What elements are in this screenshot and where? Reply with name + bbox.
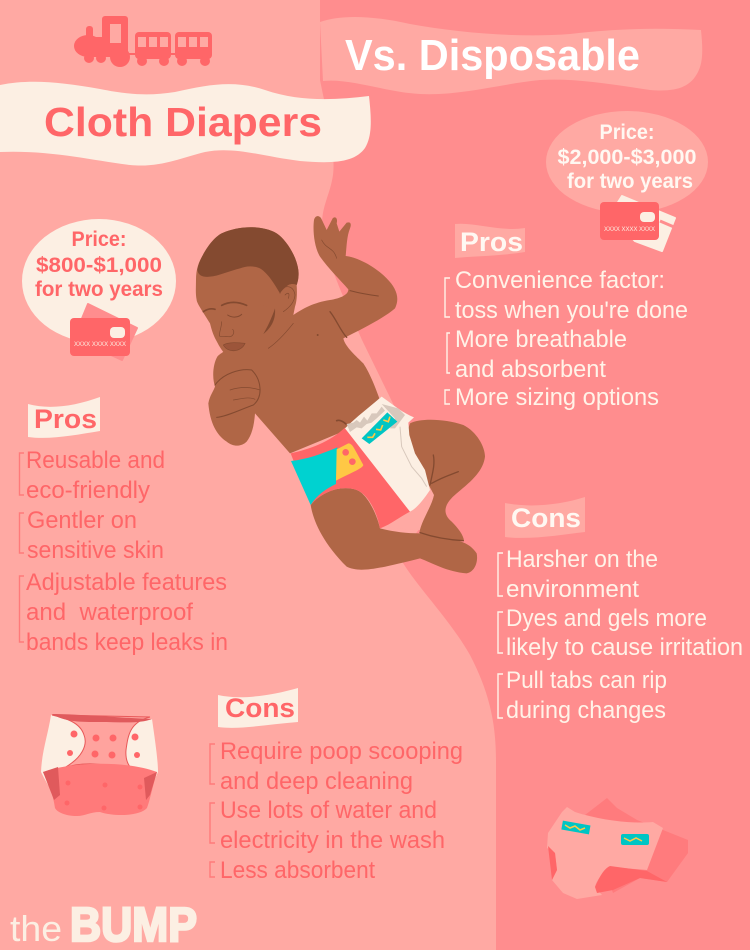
price bubble: disposable: $2,000-$3,000 (558, 146, 696, 169)
list: cloth cons: electricity in the wash (220, 827, 445, 854)
list: disposable pros: and absorbent (455, 356, 606, 383)
heading: cloth cons: Cons (225, 693, 295, 723)
list: disposable cons: Harsher on the (506, 546, 658, 573)
price bubble: disposable (546, 111, 708, 213)
logo: the bump: the (10, 908, 62, 949)
baby lower leg (311, 488, 477, 573)
list: disposable cons: environment (506, 576, 639, 603)
list: disposable cons: Dyes and gels more (506, 605, 707, 632)
heading: cloth cons (218, 688, 298, 728)
panel: disposable background (320, 0, 750, 950)
price bubble: cloth: Price: (72, 228, 126, 251)
icon: train (74, 16, 212, 67)
icon: credit card disposable: XXXX XXXX XXXX (604, 227, 655, 233)
price bubble: disposable: for two years (567, 170, 693, 193)
diaper squiggle (400, 427, 427, 487)
diaper teal label (362, 412, 397, 444)
icon: credit card disposable (600, 196, 675, 251)
heading: disposable cons: Cons (511, 503, 581, 533)
baby hair (197, 227, 299, 293)
banner: cloth diapers: Cloth Diapers (44, 99, 322, 145)
price bubble: disposable: Price: (600, 121, 654, 144)
list: disposable pros: Convenience factor: (455, 267, 665, 294)
diaper red body (291, 428, 410, 528)
logo: the bump (10, 899, 197, 950)
list: disposable pros: toss when you're done (455, 297, 688, 324)
list: cloth cons: Use lots of water and (220, 797, 437, 824)
baby illustration (196, 216, 485, 573)
banner: vs. disposable: Vs. Disposable (345, 31, 640, 80)
list: disposable cons: during changes (506, 697, 666, 724)
heading: cloth pros: Pros (34, 404, 97, 434)
price bubble: cloth: $800-$1,000 (36, 254, 162, 277)
heading: cloth pros (28, 397, 100, 438)
baby face details (203, 240, 463, 541)
list: cloth pros: and waterproof (26, 599, 193, 626)
diaper grey shadow (382, 404, 405, 428)
price bubble: cloth (22, 219, 176, 343)
heading: disposable pros: Pros (460, 227, 523, 257)
list: cloth pros: Adjustable features (26, 569, 227, 596)
list: cloth cons: Require poop scooping (220, 738, 463, 765)
list: disposable cons (498, 546, 743, 724)
list: cloth cons: Less absorbent (220, 857, 375, 884)
list: cloth pros (20, 447, 228, 656)
heading: disposable cons (505, 497, 585, 538)
list: cloth pros: Reusable and (26, 447, 165, 474)
baby body (196, 216, 397, 453)
baby chin (213, 300, 293, 360)
list: cloth cons: and deep cleaning (220, 768, 413, 795)
list: disposable pros: More breathable (455, 326, 627, 353)
list: disposable cons: likely to cause irritation (506, 634, 743, 661)
list: cloth pros: sensitive skin (27, 537, 164, 564)
list: cloth pros: eco-friendly (26, 477, 150, 504)
icon: credit card cloth: XXXX XXXX XXXX (74, 342, 126, 348)
banner: vs. disposable (320, 17, 702, 94)
diaper teal section (291, 447, 337, 505)
list: disposable cons: Pull tabs can rip (506, 667, 667, 694)
icon: credit card cloth (70, 304, 137, 360)
diaper white panel (345, 397, 430, 512)
list: cloth pros: Gentler on (27, 507, 137, 534)
diaper squiggle waist (347, 407, 385, 432)
cheek shadow (263, 308, 275, 334)
list: cloth pros: bands keep leaks in (26, 629, 228, 656)
diaper yellow tab (336, 443, 363, 481)
baby upper leg (407, 420, 485, 541)
list: disposable pros (445, 267, 688, 411)
list: cloth cons (210, 738, 463, 884)
price bubble: cloth: for two years (35, 278, 163, 301)
icon: disposable diaper (547, 798, 688, 899)
leg gap patch (393, 490, 433, 530)
diaper (291, 397, 430, 528)
icon: cloth diaper (41, 714, 158, 816)
banner: cloth diapers (0, 82, 371, 166)
list: disposable pros: More sizing options (455, 384, 659, 411)
